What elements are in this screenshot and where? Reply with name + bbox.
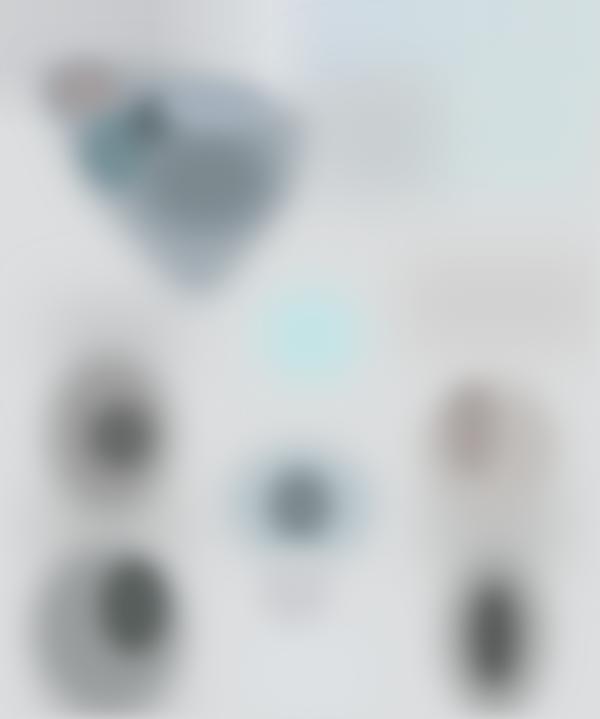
blue-grey right patch xyxy=(163,83,267,127)
grey lower core xyxy=(139,128,271,232)
cyan glow xyxy=(260,291,360,379)
blob: upper left xyxy=(48,353,172,517)
blob: lower right xyxy=(445,552,545,718)
mauve upper-left patch xyxy=(47,62,123,118)
teal left patch xyxy=(82,112,154,188)
main triangular shape xyxy=(35,62,310,295)
blob: lower left xyxy=(32,542,184,718)
blob: centre xyxy=(226,445,374,626)
dark central patch xyxy=(126,97,178,153)
blob: upper right xyxy=(422,379,558,511)
top colour strip xyxy=(0,0,600,98)
